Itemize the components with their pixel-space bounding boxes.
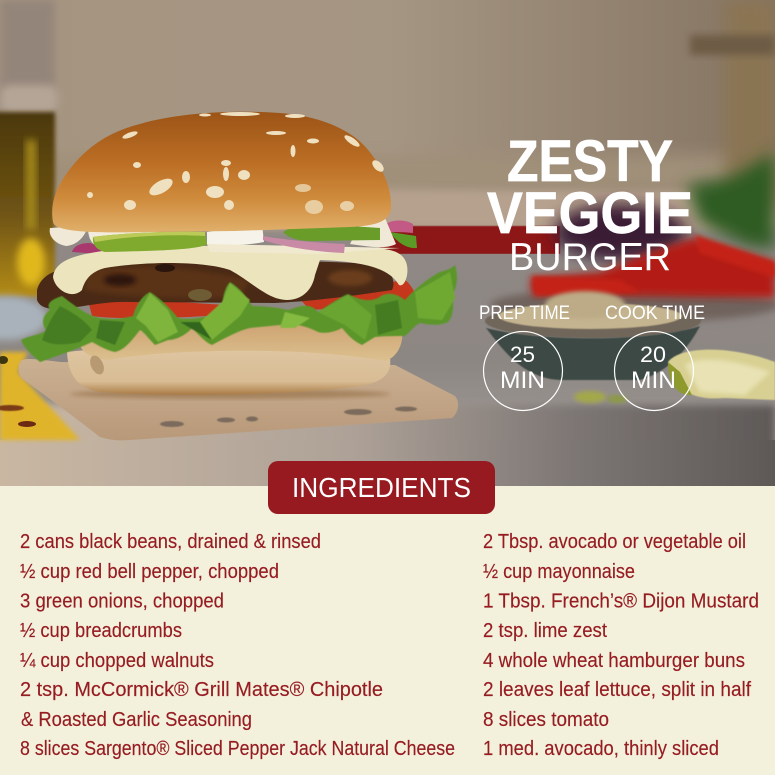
veggie patty — [37, 260, 393, 309]
ingredients heading badge: INGREDIENTS — [292, 472, 471, 503]
onion and avocado behind the cheese — [72, 220, 417, 254]
background: blue plate and yellow table reflection — [0, 296, 80, 440]
title: VEGGIE — [487, 181, 693, 246]
panel: ingredients background — [0, 486, 775, 775]
ingredient list: left column: 2 cans black beans, drained & rinsed — [20, 531, 321, 553]
tomato slices — [87, 280, 417, 318]
red onion slice — [263, 236, 345, 253]
prep time: 25 — [510, 342, 535, 367]
prep time: PREP TIME — [479, 302, 570, 324]
photo background: blurred kitchen scene — [0, 0, 775, 486]
ingredient list: right column: 2 Tbsp. avocado or vegetable oil — [483, 531, 746, 553]
ingredient list: right column: 2 tsp. lime zest — [483, 620, 607, 642]
burger — [21, 112, 457, 395]
title: ZESTY — [507, 129, 673, 194]
cook time: MIN — [631, 367, 676, 394]
cook time — [605, 302, 705, 410]
ingredient list: left column: 2 tsp. McCormick® Grill Mates® Chipotle — [20, 679, 383, 701]
ingredient list: right column: 2 leaves leaf lettuce, split in half — [483, 679, 751, 701]
melted pepper jack cheese — [53, 245, 407, 300]
ingredient list: left column: 8 slices Sargento® Sliced Pepper Jack Natural Cheese — [20, 738, 455, 760]
prep time: MIN — [500, 367, 545, 394]
ingredient list: right column: 1 Tbsp. French’s® Dijon Mustard — [483, 590, 759, 612]
bottom bun — [67, 321, 402, 395]
cook time: COOK TIME — [605, 302, 705, 324]
ingredient list: right column: 4 whole wheat hamburger buns — [483, 650, 745, 672]
mayonnaise — [50, 218, 400, 254]
title — [487, 129, 693, 279]
ingredient list: right column: 1 med. avocado, thinly sliced — [483, 738, 719, 760]
background: bowl of mayonnaise and lime — [485, 291, 775, 403]
ingredient list: left column: ½ cup breadcrumbs — [20, 620, 182, 642]
cook time: 20 — [640, 342, 666, 367]
ingredients heading badge — [268, 461, 495, 514]
ingredient list: left column — [20, 531, 455, 760]
ingredient list: left column: 3 green onions, chopped — [20, 590, 224, 612]
ingredient list: left column: & Roasted Garlic Seasoning — [21, 709, 252, 731]
ingredient list: left column: ¼ cup chopped walnuts — [20, 650, 214, 672]
title: BURGER — [509, 236, 671, 279]
lettuce — [21, 265, 457, 362]
avocado slices — [93, 224, 380, 252]
background: oil bottle — [0, 0, 58, 297]
wooden cutting board — [19, 359, 458, 440]
background: blurred lettuce, peppers and onion — [490, 152, 775, 322]
ingredient list: right column — [483, 531, 759, 760]
ingredient list: right column: 8 slices tomato — [483, 709, 609, 731]
top bun with oats — [52, 112, 391, 232]
ingredient list: left column: ½ cup red bell pepper, chopped — [20, 561, 279, 583]
ingredient list: right column: ½ cup mayonnaise — [483, 561, 635, 583]
prep time — [479, 302, 570, 410]
